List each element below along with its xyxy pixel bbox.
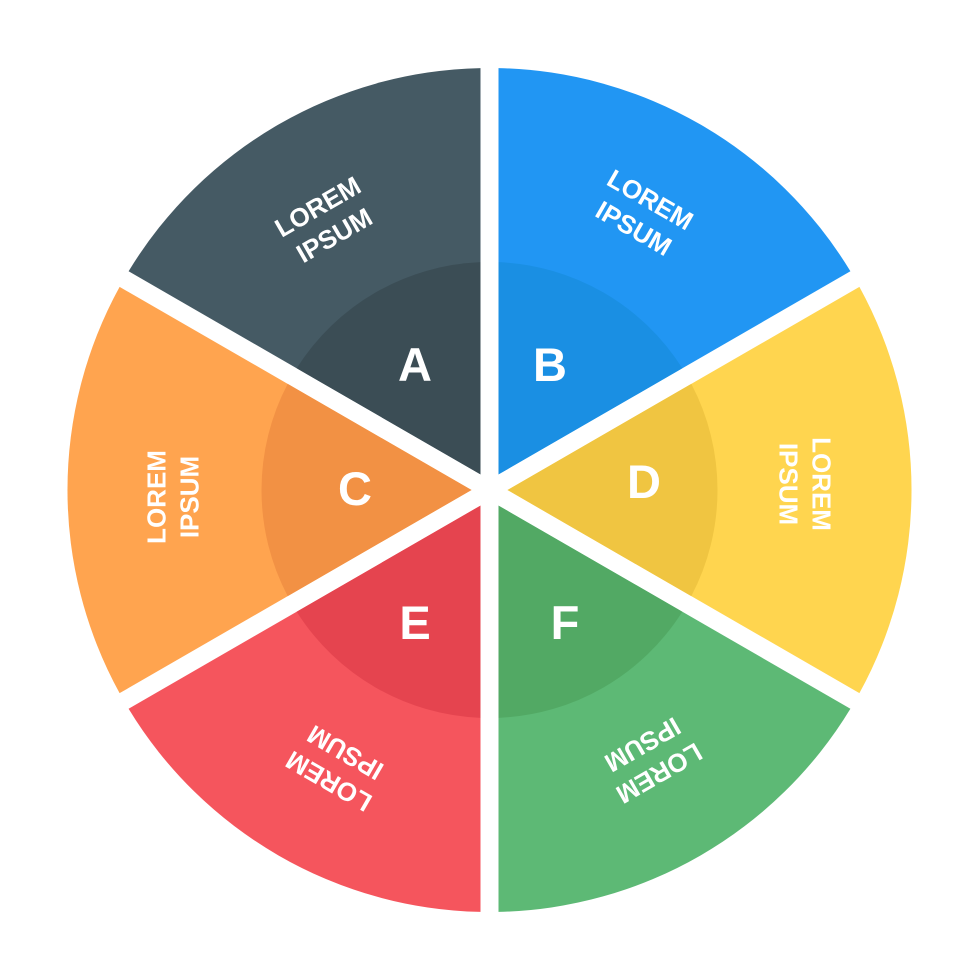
segment A: dark slate: LOREM	[270, 170, 366, 243]
segment E: red: E	[399, 596, 431, 649]
segment B: blue: B	[533, 338, 567, 391]
segment B: blue	[498, 68, 850, 474]
segment F: green: IPSUM	[600, 711, 686, 778]
segment D: yellow: D	[627, 455, 661, 508]
segment C: orange: IPSUM	[174, 456, 204, 538]
segment A: dark slate: IPSUM	[291, 202, 377, 269]
segment B: blue: IPSUM	[591, 195, 677, 262]
segment F: green: LOREM	[611, 737, 707, 810]
segment D: yellow: IPSUM	[774, 443, 804, 525]
segment B: blue: LOREM	[602, 163, 698, 236]
segment E: red	[129, 506, 480, 912]
segment C: orange	[67, 287, 472, 693]
segment C: orange: C	[338, 462, 372, 515]
segment D: yellow	[508, 287, 912, 693]
segment E: red: IPSUM	[302, 719, 388, 786]
segment D: yellow: LOREM	[806, 437, 836, 531]
segment A: dark slate: A	[398, 338, 432, 391]
segment C: orange: LOREM	[142, 450, 172, 544]
segment F: green	[498, 506, 850, 912]
segment F: green: F	[551, 596, 579, 649]
segment A: dark slate	[129, 68, 480, 474]
segment E: red: LOREM	[281, 745, 377, 818]
